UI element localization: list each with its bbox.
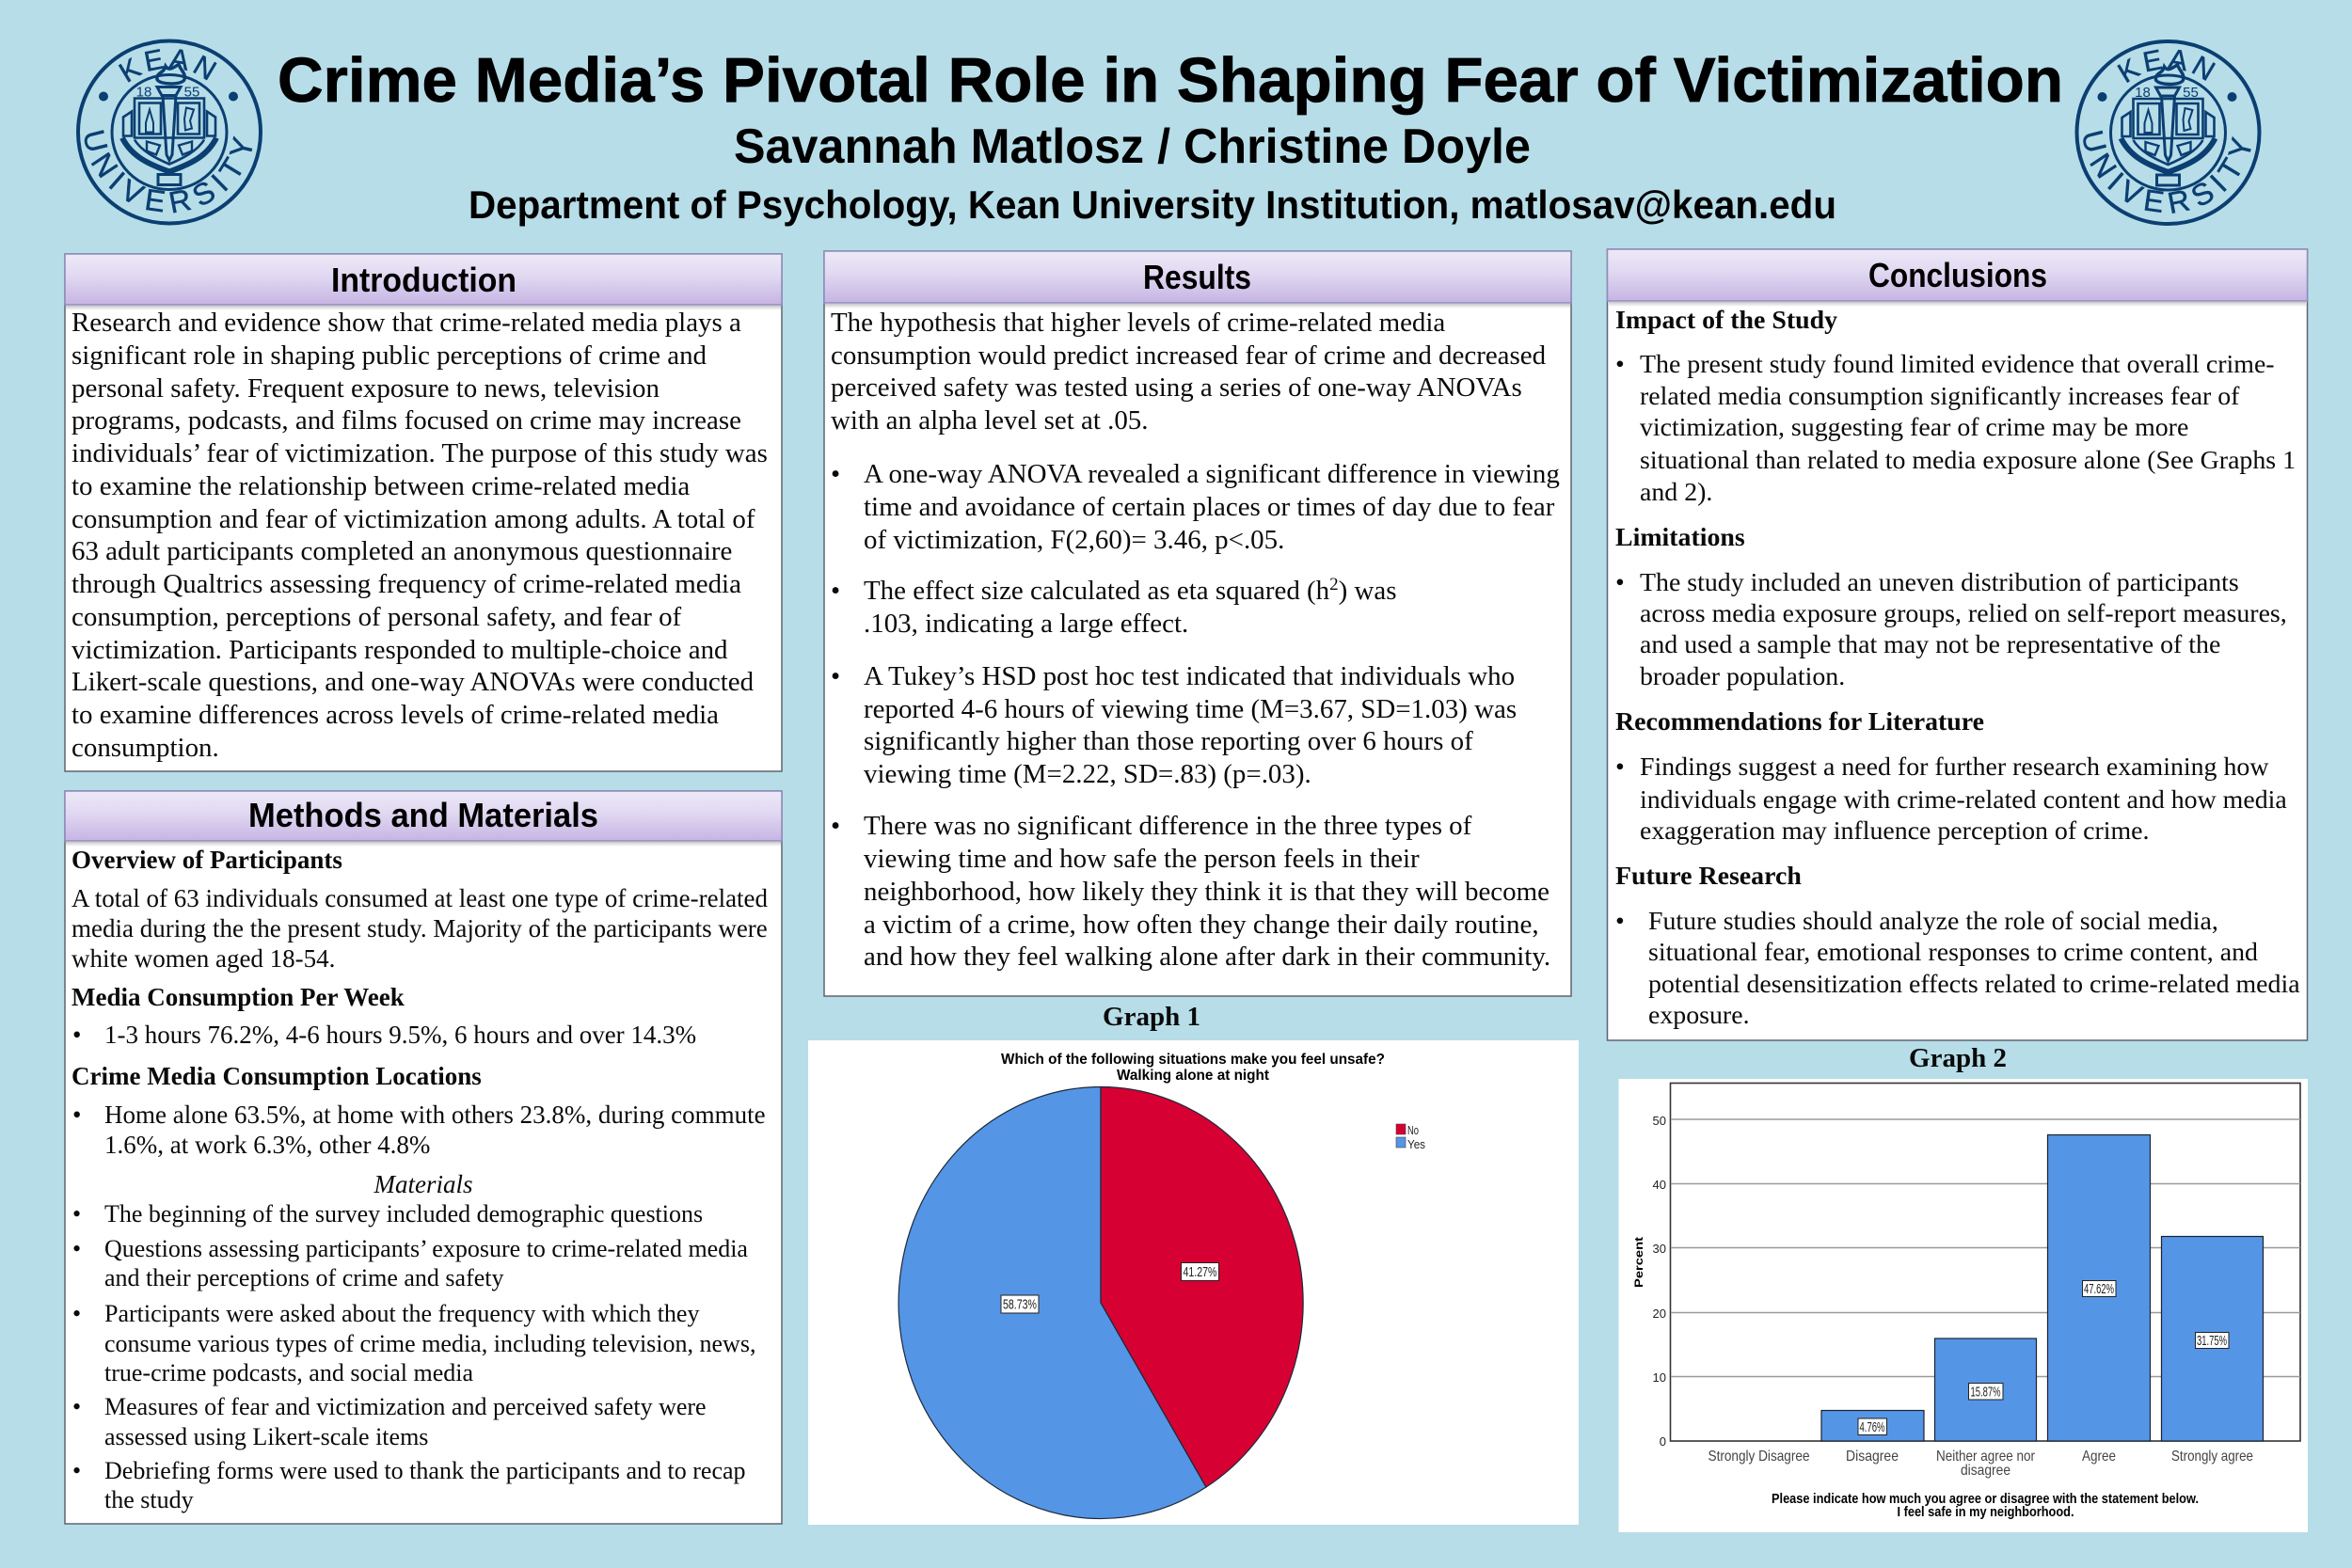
text block: limitations: broader population.	[1640, 662, 1845, 691]
text block: Tukey post hoc: significantly higher than those reporting over 6 hours of	[864, 726, 1473, 756]
text block: no significant difference: viewing time and how safe the person feels in their	[864, 844, 1420, 874]
bar: Strongly agree 31.75%	[2162, 1236, 2264, 1441]
text block: impact of the study: The present study found limited evidence that overall crime-	[1640, 350, 2275, 379]
text block: media consumption per week: •	[72, 1021, 81, 1049]
text block: impact of the study	[1615, 306, 2296, 507]
text block: future research: Future Research	[1615, 862, 1802, 891]
heading: Methods and Materials	[65, 791, 782, 841]
text block: impact of the study: •	[1615, 350, 1625, 379]
text block: crime media consumption locations: 1.6%, at work 6.3%, other 4.8%	[104, 1131, 430, 1159]
text block: future research	[1615, 862, 2300, 1030]
logo: Kean University seal right: KEAN	[2117, 49, 2216, 83]
text block: limitations: and used a sample that may not be representative of the	[1640, 630, 2220, 659]
legend: Yes	[1407, 1137, 1425, 1151]
text block: materials: •	[72, 1300, 81, 1327]
heading: Graph 1: Graph 1	[1103, 1002, 1200, 1032]
text block: overview of participants: Overview of Participants	[72, 846, 342, 874]
text block: ANOVA finding	[831, 459, 1560, 555]
panel: Results	[824, 251, 1571, 996]
text block: Tukey post hoc: reported 4-6 hours of viewing time (M=3.67, SD=1.03) was	[864, 694, 1517, 724]
text block: overview of participants: media during the the present study. Majority of the participants were	[72, 914, 768, 942]
logo: Kean University seal left: 18	[136, 85, 151, 100]
legend: No	[1407, 1123, 1419, 1137]
text block: recommendations for literature	[1615, 707, 2287, 846]
authors: Savannah Matlosz / Christine Doyle	[734, 119, 1531, 174]
text block: crime media consumption locations: Home alone 63.5%, at home with others 23.8%, during commute	[104, 1101, 766, 1129]
text block: crime media consumption locations: •	[72, 1101, 81, 1129]
text block: overview of participants: A total of 63 individuals consumed at least one type of crime-related	[72, 884, 769, 912]
text block: hypothesis: perceived safety was tested using a series of one-way ANOVAs	[831, 372, 1522, 403]
x axis category labels: disagree	[1961, 1463, 2010, 1479]
text block: media consumption per week: Media Consumption Per Week	[72, 983, 405, 1011]
text block: introduction body: consumption, perceptions of personal safety, and fear of	[72, 602, 682, 632]
text block: materials: true-crime podcasts, and social media	[104, 1359, 473, 1386]
text block: no significant difference	[831, 811, 1550, 972]
text block: materials: Measures of fear and victimization and perceived safety were	[104, 1393, 707, 1420]
text block: materials: assessed using Likert-scale items	[104, 1423, 428, 1450]
x axis title: I feel safe in my neighborhood.	[1897, 1504, 2074, 1520]
text block: future research: potential desensitization effects related to crime-related media	[1648, 970, 2300, 999]
text block: Tukey post hoc: A Tukey’s HSD post hoc test indicated that individuals who	[864, 661, 1515, 691]
text block: impact of the study: Impact of the Study	[1615, 306, 1837, 335]
title: Crime Media’s Pivotal Role in Shaping Fear of Victimization	[278, 45, 2063, 116]
logo: Kean University seal left	[76, 40, 262, 226]
y axis tick labels: 0	[1660, 1434, 1666, 1449]
text block: limitations: •	[1615, 568, 1625, 597]
text block: no significant difference: a victim of a crime, how often they change their daily routine,	[864, 910, 1539, 940]
text block: Tukey post hoc: •	[831, 661, 840, 691]
heading: Conclusions	[1607, 249, 2307, 301]
heading: Results: Results	[1143, 258, 1251, 296]
text block: hypothesis: The hypothesis that higher levels of crime-related media	[831, 308, 1445, 338]
x axis category labels: Strongly Disagree	[1708, 1449, 1810, 1465]
heading: Methods and Materials: Methods and Materials	[248, 796, 598, 834]
text block: introduction body: victimization. Participants responded to multiple-choice and	[72, 635, 728, 665]
bar: Agree 47.62%	[2047, 1134, 2151, 1441]
pie slice: No 41.27%	[1101, 1086, 1303, 1487]
text block: hypothesis: with an alpha level set at .05.	[831, 405, 1149, 436]
text block: ANOVA finding: •	[831, 459, 840, 489]
text block: introduction body: Research and evidence show that crime-related media plays a	[72, 308, 741, 338]
text block: introduction body: to examine differences across levels of crime-related media	[72, 700, 719, 730]
text block: effect size: .103, indicating a large effect.	[864, 609, 1188, 639]
text block: materials: the study	[104, 1486, 194, 1513]
text block: recommendations for literature: Recommendations for Literature	[1615, 707, 1984, 736]
text block: impact of the study: victimization, suggesting fear of crime may be more	[1640, 413, 2188, 442]
text block: ANOVA finding: time and avoidance of certain places or times of day due to fear	[864, 492, 1555, 522]
text block: overview of participants	[72, 846, 769, 973]
text block: no significant difference: and how they feel walking alone after dark in their community.	[864, 942, 1550, 972]
logo: Kean University seal right: 18	[2135, 85, 2151, 101]
chart: Graph 2 bar chart	[1618, 1079, 2308, 1532]
text block: limitations	[1615, 523, 2287, 691]
chart title	[1001, 1052, 1385, 1084]
text block: recommendations for literature: •	[1615, 752, 1625, 782]
text block: impact of the study: related media consumption significantly increases fear of	[1640, 382, 2240, 411]
text block: no significant difference: •	[831, 811, 840, 841]
text block: effect size: ) was	[1339, 576, 1397, 606]
text block: materials: Materials	[373, 1170, 472, 1198]
bar: Neither agree nor disagree 15.87%: 15.87%	[1970, 1385, 2001, 1400]
text block: impact of the study: and 2).	[1640, 478, 1712, 507]
text block: impact of the study: situational than related to media exposure alone (See Graphs 1	[1640, 446, 2296, 475]
text block: overview of participants: white women aged 18-54.	[72, 944, 335, 973]
text block: introduction body: consumption.	[72, 733, 219, 763]
text block: materials: consume various types of crime media, including television, news,	[104, 1330, 755, 1357]
panel: Introduction	[65, 254, 782, 771]
chart: Graph 1 pie chart	[808, 1040, 1579, 1525]
text block: materials: and their perceptions of crime and safety	[104, 1264, 504, 1291]
text block: introduction body	[72, 308, 768, 763]
text block: limitations: across media exposure groups, relied on self-report measures,	[1640, 599, 2287, 628]
bar: Neither agree nor disagree 15.87%	[1934, 1338, 2036, 1441]
text block: materials: •	[72, 1200, 81, 1227]
heading: Introduction: Introduction	[331, 261, 516, 299]
heading: Conclusions: Conclusions	[1868, 256, 2047, 294]
text block: materials: Participants were asked about the frequency with which they	[104, 1300, 699, 1327]
text block: limitations: The study included an uneven distribution of participants	[1640, 568, 2239, 597]
y axis tick labels: 40	[1653, 1178, 1666, 1192]
text block: future research: situational fear, emotional responses to crime content, and	[1648, 938, 2258, 967]
heading: Graph 2: Graph 2	[1909, 1043, 2007, 1073]
bar: Disagree 4.76%: 4.76%	[1859, 1420, 1885, 1435]
text block: materials: •	[72, 1393, 81, 1420]
text block: effect size: 2	[1329, 575, 1339, 594]
logo: Kean University seal left: UNIVERSITY	[85, 130, 252, 213]
text block: introduction body: to examine the relationship between crime-related media	[72, 471, 690, 501]
label: 41.27%: 41.27%	[1184, 1264, 1217, 1280]
text block: no significant difference: There was no significant difference in the three types of	[864, 811, 1472, 841]
bar: Agree 47.62%: 47.62%	[2084, 1282, 2114, 1297]
x axis category labels: Disagree	[1846, 1449, 1899, 1465]
logo: Kean University seal right	[2075, 40, 2262, 226]
text block: introduction body: programs, podcasts, and films focused on crime may increase	[72, 405, 741, 436]
x axis title	[1772, 1491, 2199, 1520]
text block: introduction body: consumption and fear of victimization among adults. A total of	[72, 504, 755, 534]
text block: ANOVA finding: A one-way ANOVA revealed a significant difference in viewing	[864, 459, 1560, 489]
x axis category labels: Agree	[2082, 1449, 2116, 1465]
text block: media consumption per week	[72, 983, 696, 1049]
chart title: Walking alone at night	[1117, 1068, 1270, 1084]
text block: introduction body: through Qualtrics assessing frequency of crime-related media	[72, 569, 741, 599]
text block: effect size: The effect size calculated as eta squared (h	[864, 576, 1329, 606]
text block: limitations: Limitations	[1615, 523, 1745, 552]
text block: recommendations for literature: Findings suggest a need for further research examining how	[1640, 752, 2268, 782]
label: 58.73%	[1001, 1295, 1039, 1313]
text block: effect size	[831, 575, 1397, 639]
text block: introduction body: individuals’ fear of victimization. The purpose of this study was	[72, 438, 768, 468]
x axis category labels	[1708, 1449, 2253, 1479]
heading: Introduction	[65, 254, 782, 305]
y axis tick labels: 30	[1653, 1242, 1666, 1256]
text block: Tukey post hoc: viewing time (M=2.22, SD=.83) (p=.03).	[864, 759, 1311, 789]
text block: crime media consumption locations	[72, 1062, 766, 1159]
heading: Results	[824, 251, 1571, 303]
text block: materials: •	[72, 1235, 81, 1262]
text block: hypothesis	[831, 308, 1547, 436]
text block: ANOVA finding: of victimization, F(2,60)= 3.46, p<.05.	[864, 525, 1284, 555]
x axis title: Please indicate how much you agree or disagree with the statement below.	[1772, 1491, 2199, 1507]
logo: Kean University seal left: KEAN	[119, 49, 216, 83]
y axis tick labels: 50	[1653, 1114, 1666, 1128]
text block: recommendations for literature: exaggeration may influence perception of crime.	[1640, 816, 2149, 846]
text block: Tukey post hoc	[831, 661, 1517, 789]
logo: Kean University seal right: UNIVERSITY	[2083, 130, 2251, 214]
text block: materials	[72, 1170, 755, 1513]
legend	[1396, 1123, 1425, 1151]
y axis tick labels: 20	[1653, 1307, 1666, 1321]
bar: Strongly agree 31.75%: 31.75%	[2197, 1334, 2227, 1349]
text block: introduction body: personal safety. Frequent exposure to news, television	[72, 373, 660, 404]
text block: materials: Debriefing forms were used to thank the participants and to recap	[104, 1457, 746, 1484]
panel: Methods and Materials	[65, 791, 782, 1524]
text block: materials: Questions assessing participants’ exposure to crime-related media	[104, 1235, 748, 1262]
text block: materials: The beginning of the survey included demographic questions	[104, 1200, 703, 1227]
text block: future research: Future studies should analyze the role of social media,	[1648, 907, 2218, 936]
text block: crime media consumption locations: Crime Media Consumption Locations	[72, 1062, 482, 1090]
pie slice: Yes 58.73%	[898, 1087, 1206, 1518]
text block: no significant difference: neighborhood, how likely they think it is that they will become	[864, 877, 1549, 907]
bar: Disagree 4.76%	[1821, 1411, 1924, 1441]
text block: introduction body: Likert-scale questions, and one-way ANOVAs were conducted	[72, 667, 755, 697]
label: 58.73%: 58.73%	[1003, 1296, 1037, 1313]
logo: Kean University seal right: 55	[2183, 85, 2199, 101]
text block: media consumption per week: 1-3 hours 76.2%, 4-6 hours 9.5%, 6 hours and over 14.3%	[104, 1021, 696, 1049]
text block: future research: exposure.	[1648, 1001, 1750, 1030]
text block: introduction body: significant role in shaping public perceptions of crime and	[72, 341, 707, 371]
panel: Conclusions	[1607, 249, 2307, 1040]
department and contact: Department of Psychology, Kean University Institution, matlosav@kean.edu	[469, 182, 1836, 227]
label: 41.27%	[1182, 1262, 1219, 1281]
y axis tick labels: 10	[1653, 1370, 1666, 1385]
logo: Kean University seal left: 55	[184, 85, 199, 100]
text block: future research: •	[1615, 907, 1625, 936]
text block: recommendations for literature: individuals engage with crime-related content and how media	[1640, 785, 2287, 815]
text block: effect size: •	[831, 576, 840, 606]
x axis category labels: Strongly agree	[2171, 1449, 2253, 1465]
chart title: Which of the following situations make you feel unsafe?	[1001, 1052, 1385, 1068]
text block: hypothesis: consumption would predict increased fear of crime and decreased	[831, 341, 1547, 371]
text block: materials: •	[72, 1457, 81, 1484]
text block: introduction body: 63 adult participants completed an anonymous questionnaire	[72, 536, 732, 566]
y axis title: Percent	[1634, 1237, 1645, 1288]
y axis tick labels	[1653, 1114, 1666, 1449]
x axis category labels: Neither agree nor	[1936, 1449, 2036, 1465]
